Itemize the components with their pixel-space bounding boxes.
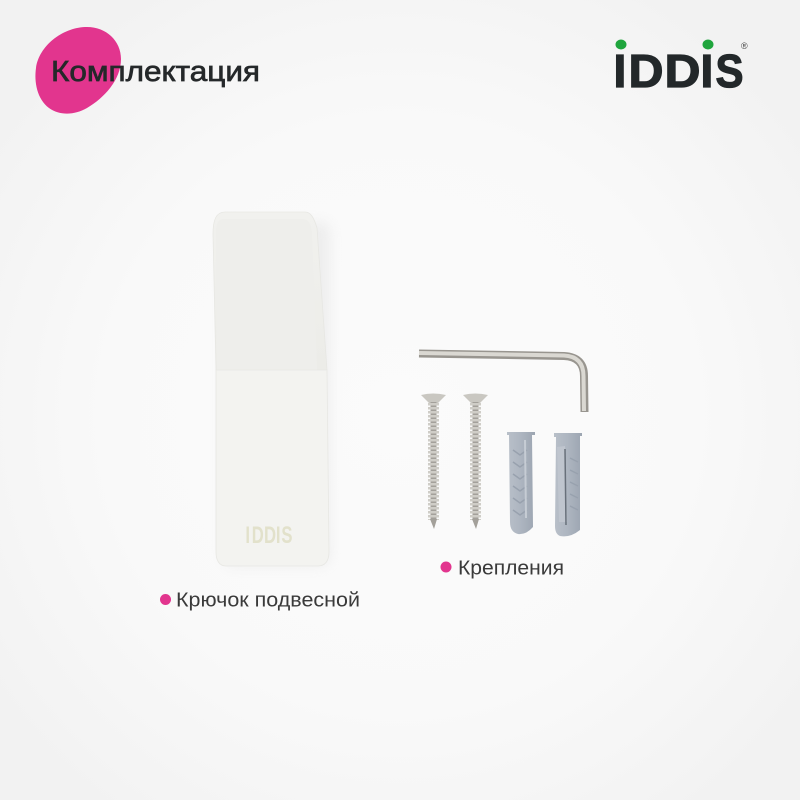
hook logo: IDDIS	[245, 522, 292, 549]
logo: IDDIS	[614, 40, 748, 97]
label: Крючок подвесной: Крючок подвесной	[176, 588, 360, 612]
logo green dots	[616, 40, 714, 50]
product: hanging hook	[213, 212, 330, 566]
product: screw 2	[463, 394, 488, 529]
product: hex key	[419, 353, 584, 412]
product: wall plug 1	[507, 432, 535, 534]
title text: Комплектация	[51, 56, 260, 88]
logo registered mark: ®	[741, 41, 748, 51]
label: Крепления: Крепления	[458, 556, 564, 580]
logo wordmark: I	[700, 45, 713, 97]
title blob	[35, 27, 121, 114]
logo wordmark: I	[614, 45, 626, 97]
hook upper part	[213, 212, 327, 370]
product: screw 1	[421, 394, 446, 529]
logo wordmark: D	[628, 45, 664, 97]
logo wordmark: S	[716, 45, 744, 97]
logo wordmark	[614, 45, 744, 97]
title: Комплектация	[35, 27, 260, 114]
logo wordmark: D	[664, 45, 700, 97]
hook lower part	[216, 370, 329, 566]
product: wall plug 2	[554, 433, 582, 536]
